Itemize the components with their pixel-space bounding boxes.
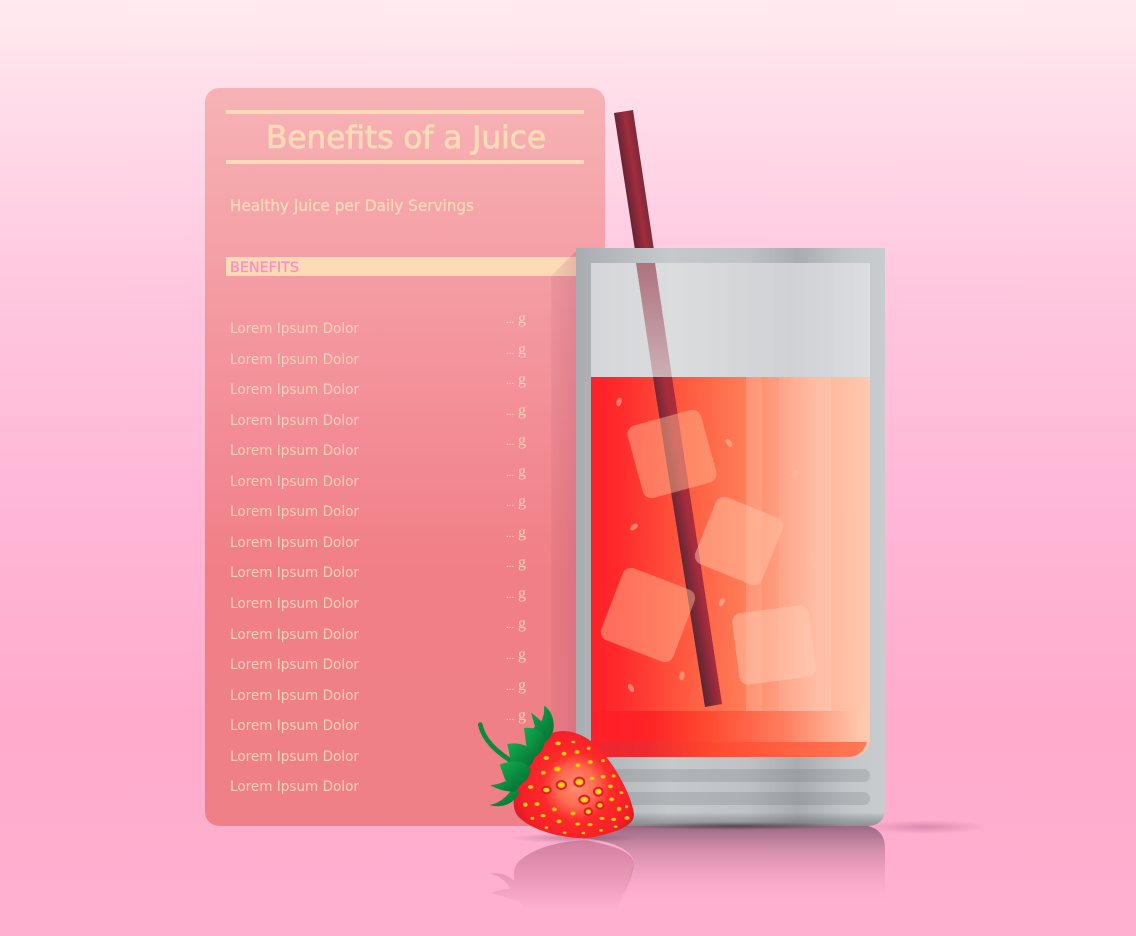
upper empty glass: [591, 263, 870, 377]
drinking straw, upper part: [614, 110, 722, 707]
panel: benefits card: [205, 88, 605, 826]
large ringed seeds: [542, 778, 604, 815]
title rule bottom: [226, 160, 584, 164]
list of gram values: ...: [506, 528, 514, 540]
list of gram values: g: [518, 707, 526, 724]
list of gram values: g: [518, 493, 526, 510]
benefits header bar: [226, 257, 578, 276]
list of gram values: ...: [506, 314, 514, 326]
list of gram values: ...: [506, 558, 514, 570]
glass body: [576, 248, 885, 826]
stem: [480, 725, 512, 761]
list of gram values: g: [518, 585, 526, 602]
list of benefit names: Lorem Ipsum Dolor: [230, 413, 359, 429]
list of benefit names: Lorem Ipsum Dolor: [230, 596, 359, 612]
list of gram values: g: [518, 524, 526, 541]
glass of juice: [576, 248, 885, 826]
juice lower band: [591, 742, 867, 757]
straw seen through empty glass: [636, 263, 672, 377]
list of benefit names: Lorem Ipsum Dolor: [230, 749, 359, 765]
list of gram values: ...: [506, 589, 514, 601]
list of benefit names: Lorem Ipsum Dolor: [230, 443, 359, 459]
benefits label: BENEFITS: [230, 260, 299, 276]
strawberry: [480, 706, 634, 838]
list of gram values: ...: [506, 497, 514, 509]
title: Benefits of a Juice: [266, 120, 546, 156]
list of gram values: ...: [506, 619, 514, 631]
list of gram values: g: [518, 432, 526, 449]
berry body: [514, 731, 634, 838]
floor shadow under strawberry: [510, 833, 640, 843]
list of benefit names: Lorem Ipsum Dolor: [230, 779, 359, 795]
list of gram values: g: [518, 341, 526, 358]
straw inside juice: [653, 377, 722, 707]
title rule top: [226, 110, 584, 114]
list of gram values: ...: [506, 711, 514, 723]
list of benefit names: Lorem Ipsum Dolor: [230, 657, 359, 673]
list of gram values: g: [518, 615, 526, 632]
list of gram values: ...: [506, 436, 514, 448]
list of benefit names: Lorem Ipsum Dolor: [230, 688, 359, 704]
list of gram values: g: [518, 646, 526, 663]
list of gram values: g: [518, 402, 526, 419]
list of gram values: ...: [506, 406, 514, 418]
list of benefit names: Lorem Ipsum Dolor: [230, 535, 359, 551]
berry seeds: [523, 741, 630, 834]
glass side shadow on panel: [551, 251, 576, 826]
ice cube 4: [731, 604, 817, 686]
list of gram values: g: [518, 554, 526, 571]
strawberry reflection: [490, 840, 634, 899]
list of benefit names: [230, 321, 359, 795]
list of benefit names: Lorem Ipsum Dolor: [230, 474, 359, 490]
list of benefit names: Lorem Ipsum Dolor: [230, 352, 359, 368]
leaves: [489, 706, 554, 806]
list of benefit names: Lorem Ipsum Dolor: [230, 718, 359, 734]
list of gram values: ...: [506, 467, 514, 479]
list of gram values: g: [518, 677, 526, 694]
juice bottom band: [591, 711, 870, 742]
list of benefit names: Lorem Ipsum Dolor: [230, 504, 359, 520]
ice cube 2: [692, 494, 786, 588]
list of gram values: ...: [506, 345, 514, 357]
juice: [591, 377, 870, 757]
list of gram values: ...: [506, 681, 514, 693]
glass base shading: [576, 757, 885, 826]
juice pulp specks: [615, 397, 848, 693]
list of benefit names: Lorem Ipsum Dolor: [230, 382, 359, 398]
base groove 2: [600, 792, 870, 805]
ice cube 3: [598, 565, 698, 665]
list of benefit names: Lorem Ipsum Dolor: [230, 321, 359, 337]
floor shadow right of glass: [863, 820, 987, 834]
list of gram values: [506, 310, 526, 724]
floor reflection of glass: [560, 826, 885, 905]
base groove 1: [600, 769, 870, 782]
list of gram values: ...: [506, 650, 514, 662]
list of gram values: ...: [506, 375, 514, 387]
list of benefit names: Lorem Ipsum Dolor: [230, 565, 359, 581]
list of gram values: g: [518, 463, 526, 480]
dark contact shadow: [625, 822, 845, 830]
ice cube 1: [625, 408, 719, 500]
list of gram values: g: [518, 310, 526, 327]
subtitle: Healthy Juice per Daily Servings: [230, 196, 474, 215]
list of benefit names: Lorem Ipsum Dolor: [230, 627, 359, 643]
list of gram values: g: [518, 371, 526, 388]
light strips in juice: [746, 377, 831, 711]
